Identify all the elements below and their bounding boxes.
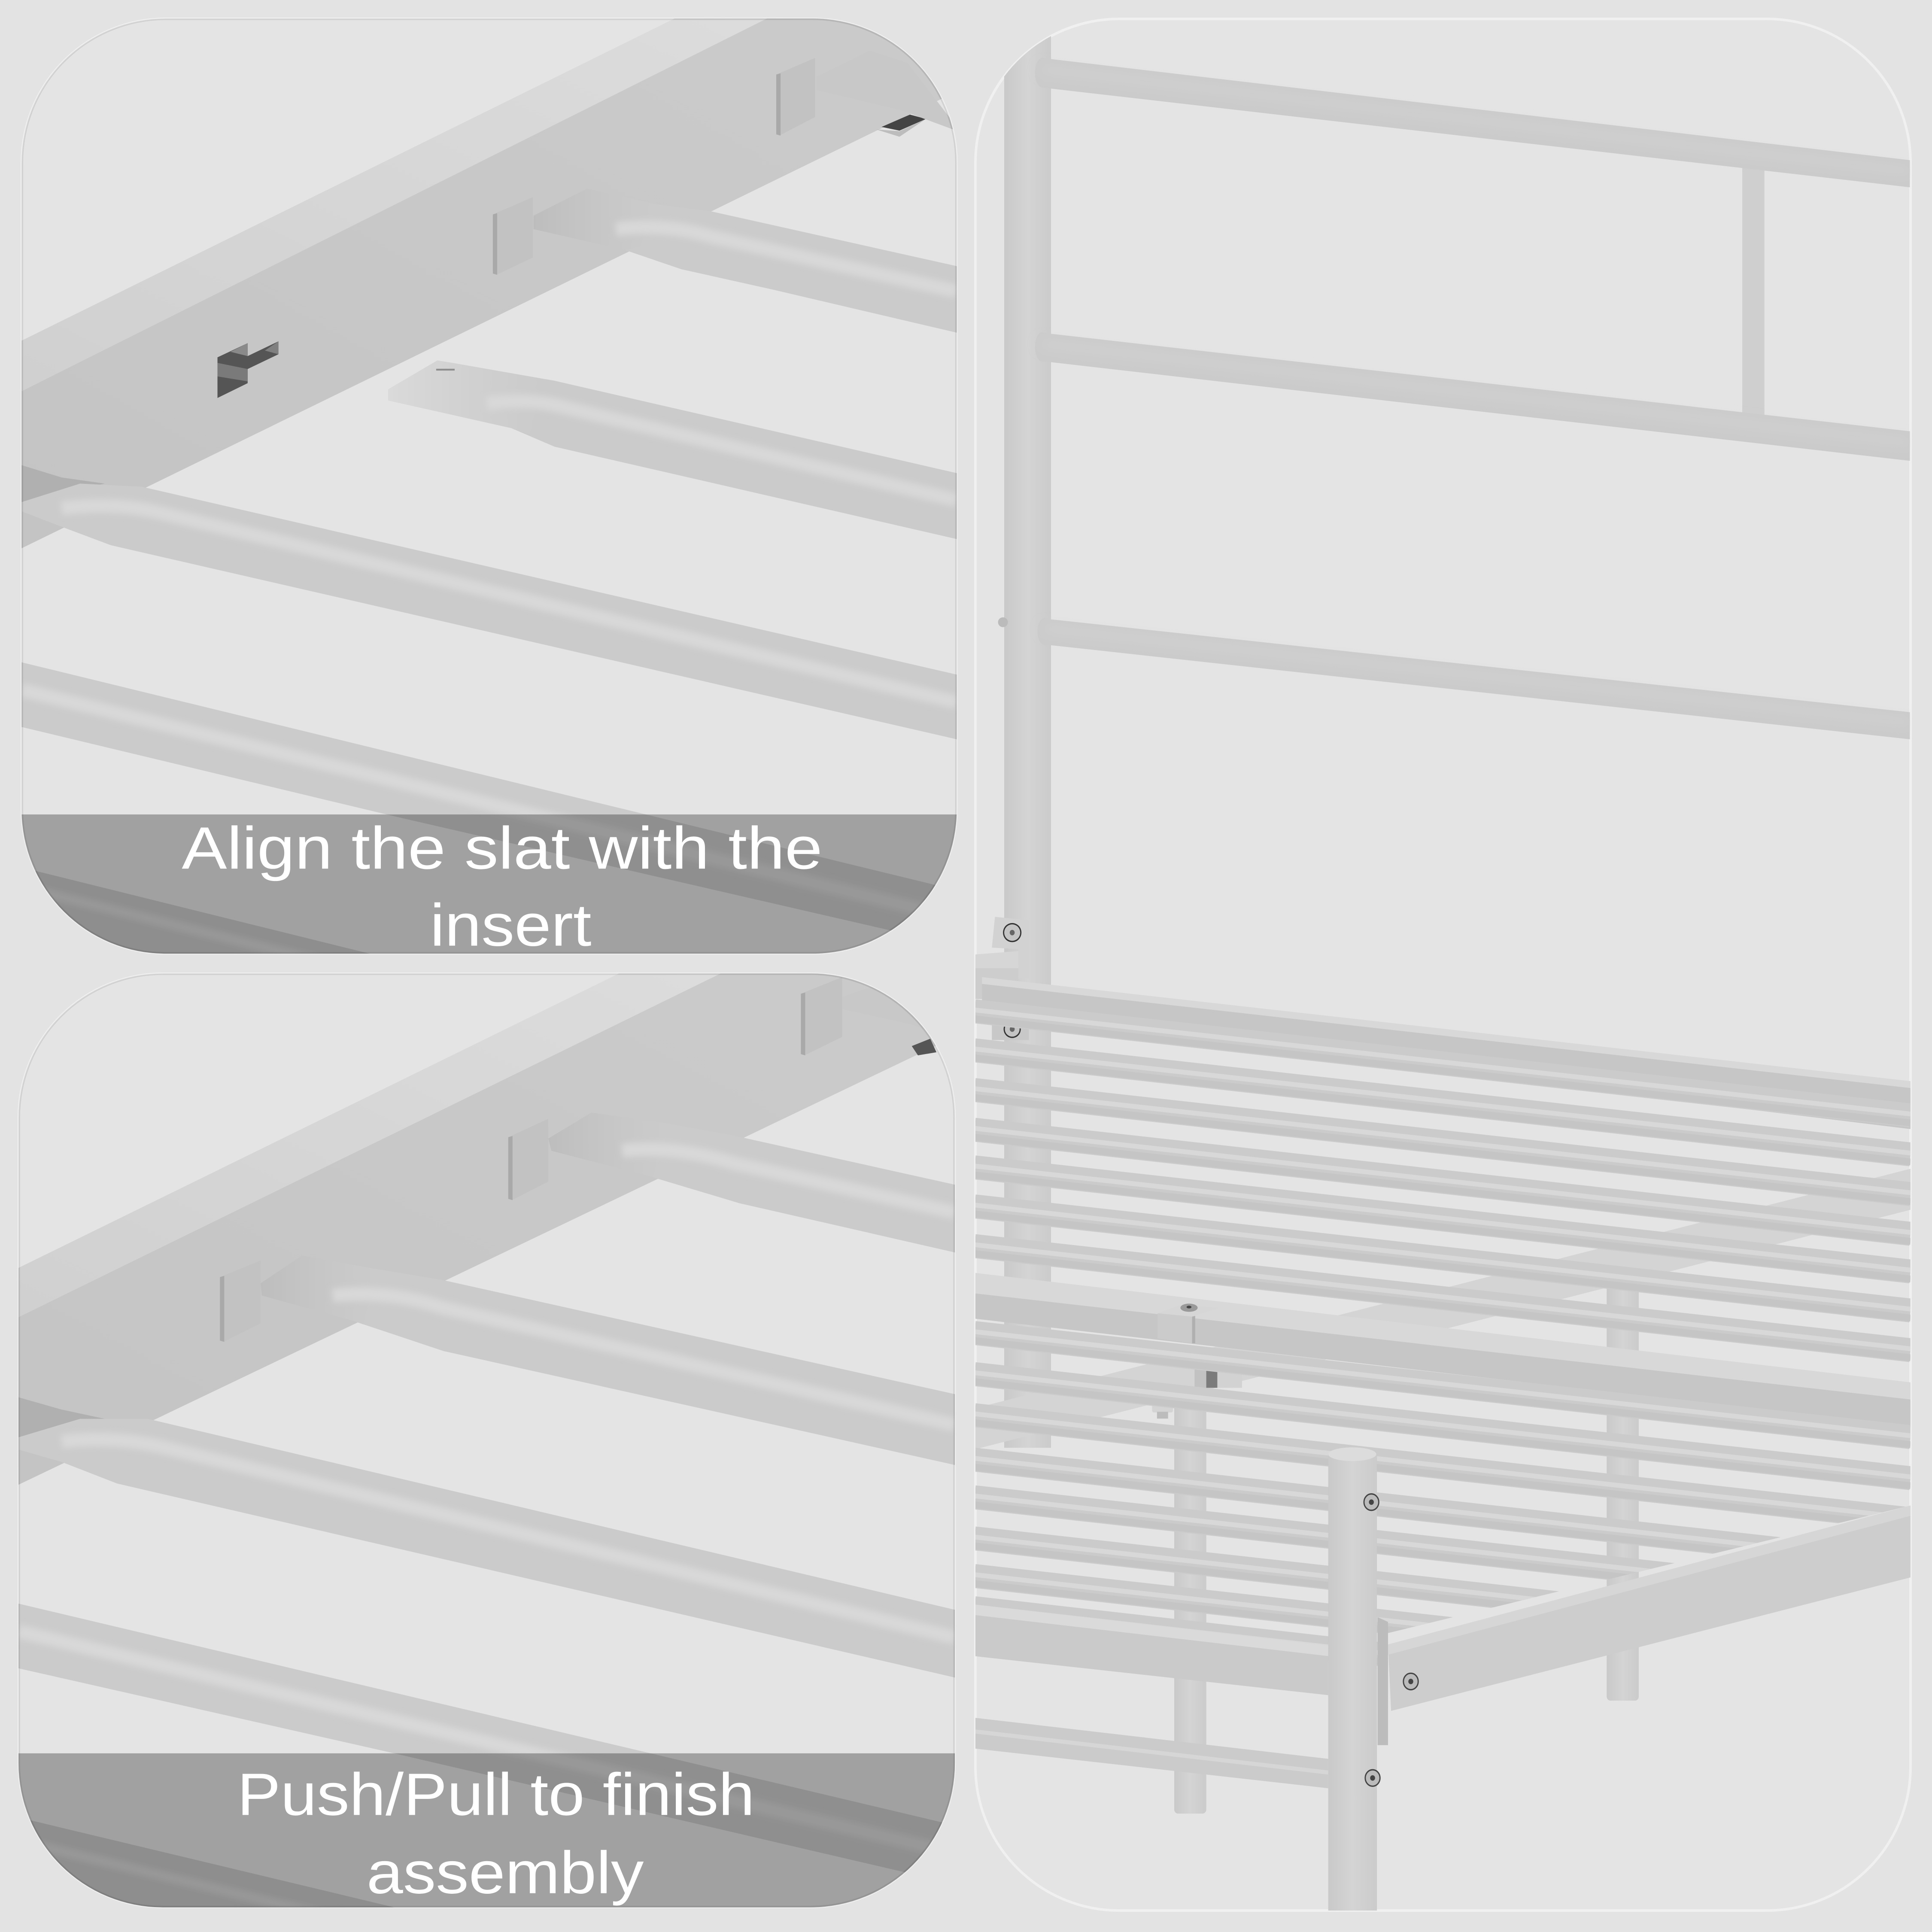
headboard upper section bbox=[998, 0, 1910, 1448]
caption: push or pull: Push/Pull to finish bbox=[237, 1761, 755, 1828]
panel: align the slat bbox=[21, 18, 961, 1010]
bracket a bbox=[220, 1261, 261, 1342]
foot post bbox=[1328, 1447, 1377, 1926]
caption: push or pull bbox=[237, 1761, 755, 1906]
upper bed slats bbox=[975, 1010, 1911, 1358]
side rail bracket bbox=[1152, 1303, 1242, 1419]
caption: push or pull: assembly bbox=[367, 1840, 644, 1906]
headboard vertical bar bbox=[1742, 166, 1765, 416]
panel: push or pull bbox=[18, 973, 961, 1932]
centre leg bbox=[1174, 1400, 1206, 1814]
side rail bbox=[21, 18, 961, 548]
caption band bbox=[18, 1753, 955, 1914]
slat D bbox=[18, 1604, 955, 1884]
slat at top corner bbox=[842, 986, 961, 1055]
slat C bbox=[18, 1397, 955, 1677]
slat at top corner bbox=[816, 51, 961, 137]
foot rail bbox=[975, 1605, 1328, 1695]
bracket b bbox=[508, 1119, 548, 1200]
post bolt bbox=[998, 617, 1008, 627]
caption: align bbox=[182, 815, 823, 959]
centre spine bbox=[975, 1169, 1911, 1449]
bracket one bbox=[493, 197, 533, 275]
head post bbox=[1004, 0, 1051, 1448]
head end rail bbox=[982, 977, 1911, 1129]
headboard top tube bbox=[1035, 58, 1910, 187]
slat E bbox=[18, 1817, 677, 1932]
bracket c bbox=[801, 977, 842, 1055]
head bracket bbox=[975, 917, 1029, 1040]
headboard middle tube bbox=[1035, 332, 1910, 461]
slat two, detached bbox=[388, 360, 957, 539]
slat one bbox=[534, 207, 957, 333]
slat three bbox=[21, 465, 957, 739]
caption: align: insert bbox=[430, 892, 592, 959]
caption band bbox=[21, 814, 957, 956]
slat five bbox=[21, 867, 677, 1010]
slat insert slot bbox=[218, 341, 279, 398]
caption: align: Align the slat with the bbox=[182, 815, 823, 881]
lower frame section bbox=[975, 917, 1911, 1926]
back leg bbox=[1607, 1283, 1639, 1701]
lower bed slats bbox=[975, 1332, 1911, 1722]
slat B bbox=[261, 1255, 955, 1465]
headboard lower tube bbox=[1037, 618, 1910, 739]
slat four bbox=[21, 662, 957, 946]
foot lower tube bbox=[975, 1718, 1328, 1788]
panel: bed frame bbox=[975, 0, 1911, 1926]
side rail far bbox=[975, 1273, 1911, 1427]
bolts bbox=[1364, 1494, 1418, 1786]
slat A bbox=[548, 1113, 955, 1252]
near side rail bbox=[1378, 1506, 1911, 1745]
bracket two bbox=[776, 58, 815, 136]
side rail bbox=[18, 973, 961, 1485]
